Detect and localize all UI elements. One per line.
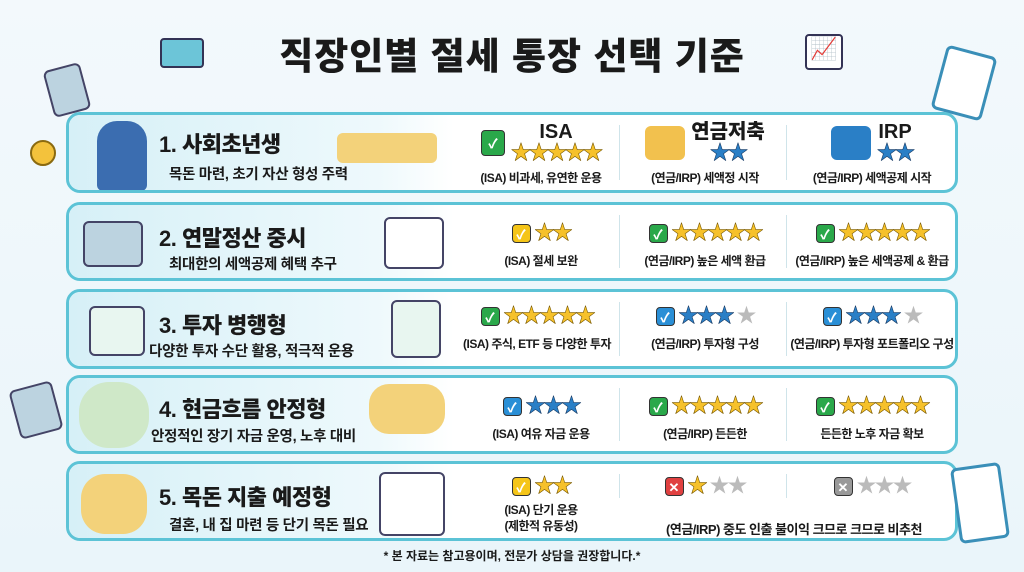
row 4: ✓: [653, 400, 663, 414]
icon: coin: [30, 140, 56, 166]
row 2: ★★★★★: [672, 222, 762, 244]
row 3: (ISA) 주식, ETF 등 다양한 투자: [463, 337, 611, 351]
sub 2: 최대한의 세액공제 혜택 추구: [169, 257, 337, 273]
col IRP: IRP: [878, 121, 912, 143]
col IRP: ★★: [877, 142, 913, 164]
row 3: ★★★: [678, 305, 732, 327]
row 5: [66, 461, 958, 541]
row 3: (연금/IRP) 투자형 구성: [651, 337, 759, 351]
col pension: (연금/IRP) 세액정 시작: [651, 171, 759, 185]
row 2: (연금/IRP) 높은 세액 환급: [644, 254, 766, 268]
row 4: ★★★: [526, 395, 580, 417]
icon: clipboard bottom right: [950, 462, 1010, 544]
row 2: ✓: [820, 226, 830, 242]
row 3: ✓: [660, 310, 670, 324]
row 3: ★: [736, 305, 754, 327]
row 4: 든든한 노후 자금 확보: [820, 427, 924, 441]
row 4: ★★★★★: [838, 395, 928, 417]
icon: bankbook: [160, 38, 204, 68]
heading 3: 3. 투자 병행형: [159, 313, 286, 338]
row 3: ★: [904, 305, 922, 327]
warning text: (연금/IRP) 중도 인출 불이익 크므로 크므로 비추천: [666, 522, 922, 537]
row 3: ✓: [827, 310, 837, 324]
col IRP: (연금/IRP) 세액공제 시작: [813, 171, 931, 185]
row 3: ✓: [485, 310, 495, 324]
row 2: ✓: [653, 226, 663, 242]
heading 4: 4. 현금흐름 안정형: [159, 397, 326, 422]
sub 5: 결혼, 내 집 마련 등 단기 목돈 필요: [169, 518, 368, 534]
col pension: [645, 121, 765, 185]
col ISA: ISA: [539, 121, 573, 143]
row 2: (연금/IRP) 높은 세액공제 & 환급: [795, 254, 949, 268]
row 5: ✓: [516, 480, 526, 494]
row 5: ★★★: [856, 475, 910, 497]
row 3: [66, 289, 958, 369]
sub 3: 다양한 투자 수단 활용, 적극적 운용: [149, 344, 354, 360]
sub 4: 안정적인 장기 자금 운영, 노후 대비: [151, 429, 356, 445]
row 2: (ISA) 절세 보완: [504, 254, 578, 268]
heading 5: 5. 목돈 지출 예정형: [159, 485, 331, 510]
row 3: (연금/IRP) 투자형 포트폴리오 구성: [790, 337, 954, 351]
row 4: ✓: [820, 400, 830, 414]
row 5: ★: [688, 475, 706, 497]
heading 1: 1. 사회초년생: [159, 132, 281, 157]
col pension: ★★: [710, 142, 746, 164]
row 5: ✕: [838, 480, 848, 494]
row 4: [66, 375, 958, 454]
col ISA: ★★★★★: [511, 142, 601, 164]
icon: calculator bottom left: [8, 380, 64, 440]
row 5: ✕: [669, 480, 679, 494]
icon: person: [97, 121, 147, 191]
icon: clipboard right top: [930, 44, 998, 122]
row 5: (ISA) 단기 운용: [504, 503, 578, 517]
row 2: ★★: [534, 222, 570, 244]
icon: chart: [805, 34, 843, 70]
row 4: (연금/IRP) 든든한: [663, 427, 747, 441]
col ISA: [480, 121, 602, 185]
col ISA: (ISA) 비과세, 유연한 운용: [480, 171, 602, 185]
col pension: 연금저축: [691, 121, 765, 143]
row 1: [66, 112, 958, 193]
col ISA: ✓: [488, 136, 498, 150]
row 5: (제한적 유동성): [504, 519, 578, 533]
row 3: ★★★★★: [504, 305, 594, 327]
row 4: ✓: [507, 400, 517, 414]
title: 직장인별 절세 통장 선택 기준: [279, 36, 745, 77]
footnote: * 본 자료는 참고용이며, 전문가 상담을 권장합니다.*: [384, 549, 640, 563]
col IRP: [813, 121, 932, 185]
icon: calculator left: [42, 62, 92, 118]
row 4: (ISA) 여유 자금 운용: [492, 427, 590, 441]
heading 2: 2. 연말정산 중시: [159, 226, 306, 251]
coins/trees: [337, 133, 437, 163]
sub 1: 목돈 마련, 초기 자산 형성 주력: [169, 167, 348, 183]
row 2: ★★★★★: [838, 222, 928, 244]
row 2: ✓: [516, 226, 526, 242]
row 4: ★★★★★: [672, 395, 762, 417]
row 3: ★★★: [846, 305, 900, 327]
row 5: ★★: [534, 475, 570, 497]
row 2: [66, 202, 958, 281]
icon: chart: 📈: [810, 36, 838, 61]
row 5: ★★: [710, 475, 746, 497]
